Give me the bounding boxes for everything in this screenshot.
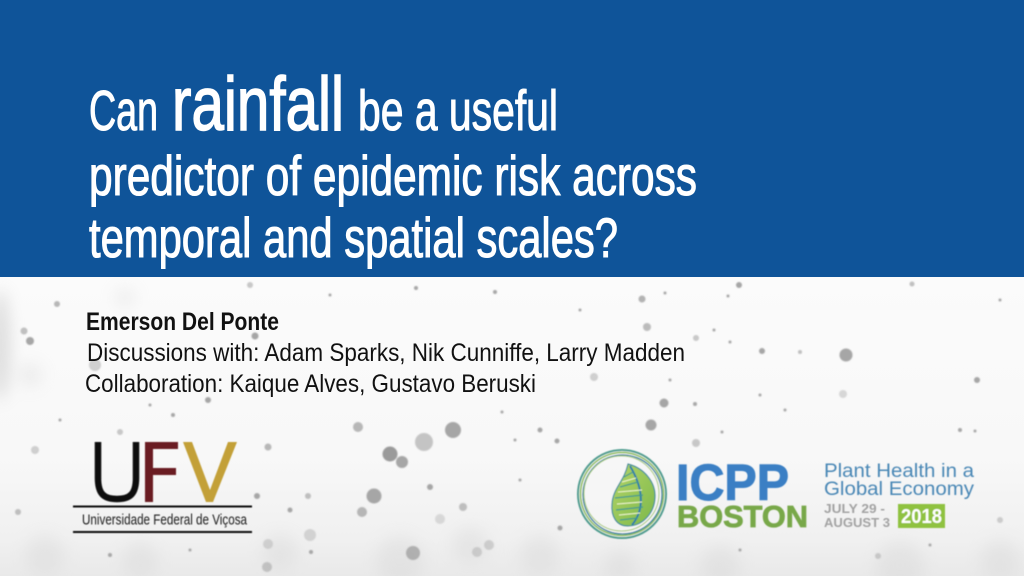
- discussions line: Discussions with: Adam Sparks, Nik Cunniffe, Larry Madden: [87, 339, 685, 367]
- icon: leaf in circle: [578, 450, 666, 538]
- logo: ICPP Boston: [578, 450, 975, 538]
- collaboration line: Collaboration: Kaique Alves, Gustavo Beruski: [85, 370, 536, 398]
- letter F: [145, 442, 178, 502]
- university name: Universidade Federal de Viçosa: [82, 512, 248, 528]
- title line 3: temporal and spatial scales?: [89, 206, 618, 269]
- letter V: [183, 442, 237, 502]
- title line 1: rainfall: [172, 62, 344, 147]
- title line 1: Can: [89, 79, 158, 143]
- ICPP wordmark: ICPP: [676, 454, 789, 511]
- logo: UFV: [73, 442, 252, 533]
- conference date line 1: JULY 29 -: [824, 502, 885, 516]
- title line 2: predictor of epidemic risk across: [89, 144, 697, 207]
- rule lines: [73, 506, 252, 533]
- conference date line 2: AUGUST 3: [824, 516, 890, 530]
- title: [89, 62, 697, 269]
- author and collaborators: [85, 308, 685, 398]
- header band: [0, 0, 1024, 277]
- background: speckled grey texture: [0, 277, 1024, 576]
- BOSTON wordmark: BOSTON: [677, 499, 808, 534]
- letter U: [98, 442, 136, 499]
- tagline line 1: Plant Health in a: [824, 461, 974, 482]
- presenter name: Emerson Del Ponte: [86, 308, 279, 336]
- title line 1: [89, 62, 558, 147]
- tagline line 2: Global Economy: [824, 479, 975, 500]
- year badge: 2018: [901, 506, 942, 528]
- title line 1: be a useful: [358, 79, 558, 143]
